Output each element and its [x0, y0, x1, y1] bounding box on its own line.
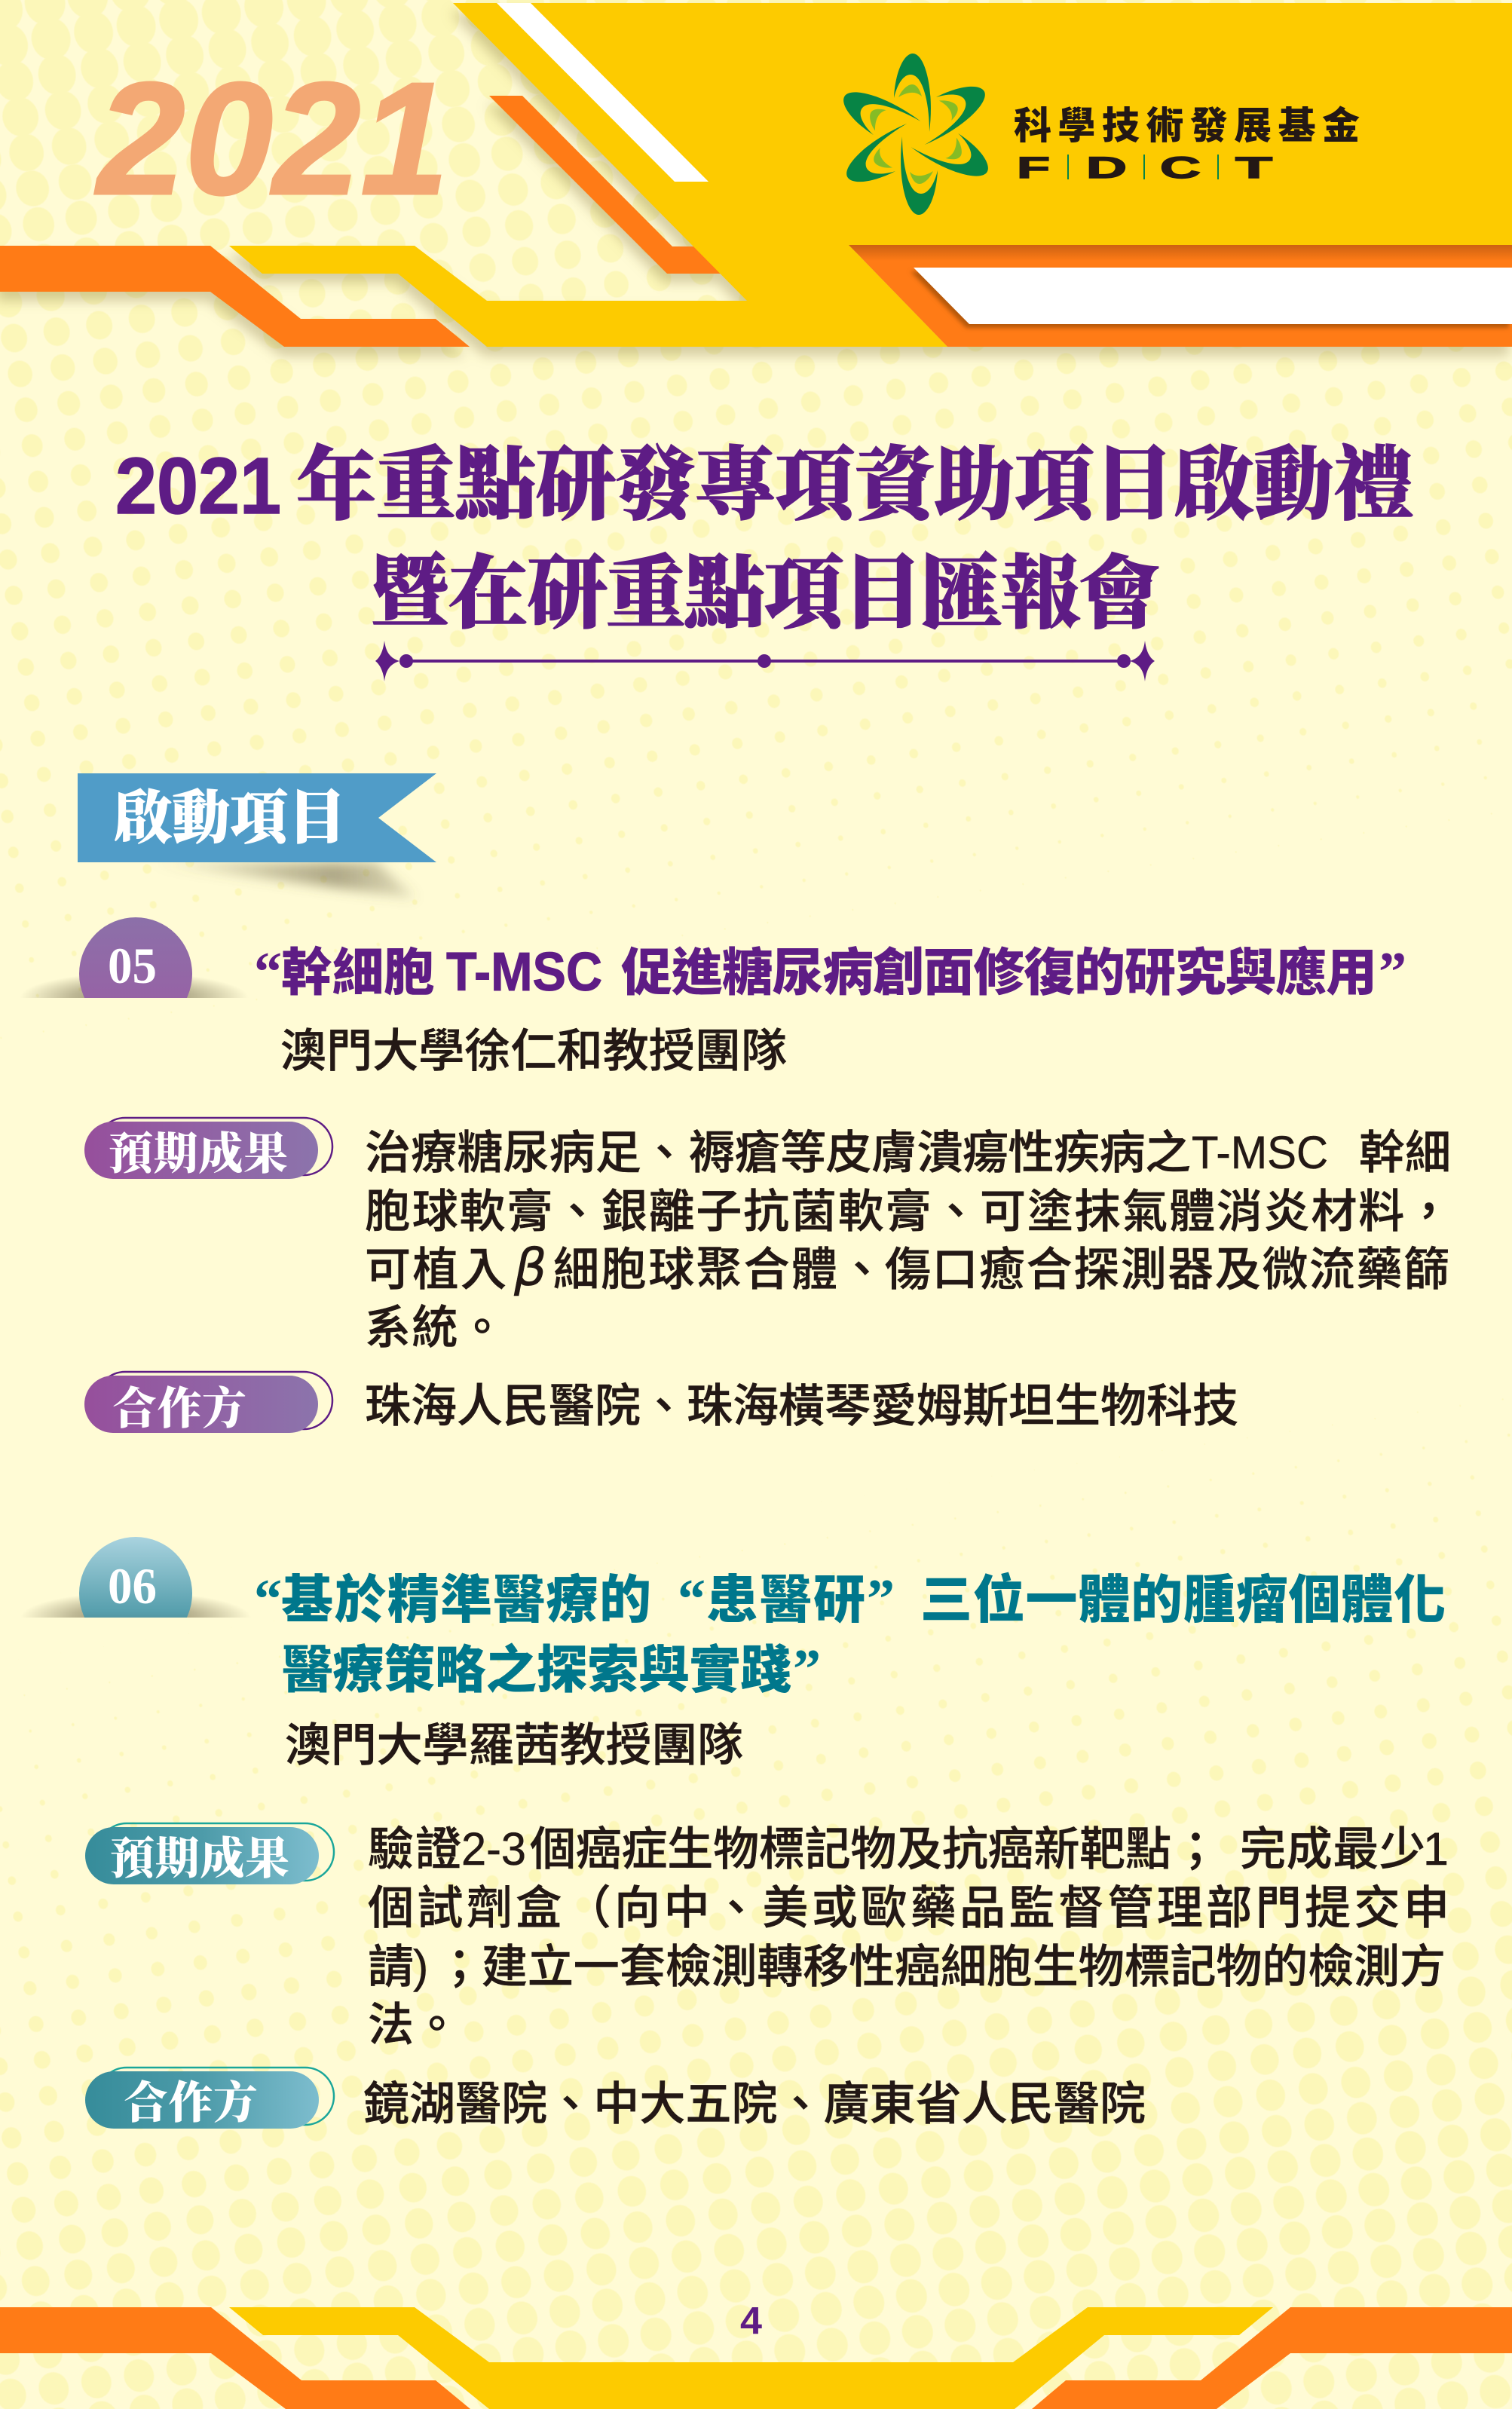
expected results label: 預期成果 — [109, 1129, 288, 1179]
project 05 title: ” — [1379, 941, 1406, 1003]
white diagonal strip — [497, 3, 709, 182]
page number: 4 — [740, 2299, 763, 2342]
section banner — [78, 773, 436, 898]
project 05 title: 幹細胞 — [281, 944, 435, 1002]
expected results text: 完成最少 — [1240, 1823, 1425, 1875]
header shapes — [0, 3, 1512, 347]
expected results text: 2-3 — [461, 1823, 526, 1875]
expected results text: ； — [436, 1941, 482, 1992]
project 05 team: 澳門大學徐仁和教授團隊 — [280, 1025, 787, 1076]
expected results text: 個試劑盒（向中、美或歐藥品監督管理部門提交申 — [368, 1882, 1449, 1933]
partners text: 珠海人民醫院、珠海橫琴愛姆斯坦生物科技 — [365, 1380, 1238, 1431]
project 05 title — [254, 941, 1406, 1003]
partners label — [84, 1372, 332, 1434]
FDCT letters — [1017, 152, 1272, 185]
white panel — [914, 268, 1512, 324]
footer shapes — [0, 2307, 470, 2409]
expected results text: T-MSC — [1192, 1127, 1328, 1178]
partners label: 合作方 — [124, 2078, 258, 2128]
expected results text: 可植入 — [365, 1244, 507, 1295]
header band — [0, 3, 1512, 347]
year 2021: 2021 — [94, 49, 448, 228]
project 06 title: 醫療策略之探索與實踐 — [282, 1642, 791, 1699]
expected results text: 傷口癒合探測器及微流藥篩 — [885, 1244, 1449, 1295]
FDCT logo — [835, 54, 1360, 215]
expected results text: 細胞球聚合體、 — [553, 1244, 885, 1295]
project 05 title: T-MSC — [446, 942, 602, 1002]
expected results label: 預期成果 — [110, 1834, 289, 1884]
project 05 title: 促進糖尿病創面修復的研究與應用 — [621, 944, 1377, 1002]
expected results text: 個癌症生物標記物及抗癌新靶點 — [530, 1823, 1171, 1875]
expected results label — [85, 1823, 334, 1884]
expected results text: 治療糖尿病足、 — [365, 1127, 687, 1178]
expected results text: 褥瘡等皮膚潰瘍性疾病之 — [689, 1127, 1191, 1178]
foundation name: 科學技術發展基金 — [1014, 105, 1360, 147]
number badge 05: 05 — [108, 937, 157, 994]
footer band — [0, 2299, 1512, 2409]
project 06 team: 澳門大學羅茜教授團隊 — [285, 1719, 743, 1771]
project 06 title: 患醫研 — [706, 1571, 865, 1629]
expected results text: 驗證 — [368, 1823, 461, 1875]
project 06 title: “ — [678, 1569, 705, 1630]
partners label: 合作方 — [112, 1384, 246, 1434]
project 06 title — [254, 1569, 1446, 1700]
number badge 05 — [26, 917, 243, 998]
banner shadow — [143, 862, 416, 898]
main title — [115, 442, 1413, 638]
project 06 — [20, 1537, 1449, 2129]
expected results text: 請 — [368, 1941, 414, 1992]
project 05 — [20, 917, 1452, 1434]
expected results text — [365, 1127, 1452, 1353]
expected results text: 系統。 — [365, 1302, 505, 1353]
expected results text: 法。 — [368, 1999, 460, 2050]
project 06 title: ” — [793, 1639, 821, 1700]
project 06 title: 三位一體的腫瘤個體化 — [920, 1571, 1446, 1629]
expected results text: 幹細 — [1359, 1127, 1451, 1178]
FDCT letters: C — [1160, 152, 1201, 185]
banner ribbon — [78, 773, 436, 862]
orange band shading — [849, 245, 1512, 261]
expected results text: 1 — [1423, 1823, 1449, 1875]
title divider ornament — [375, 641, 1155, 681]
FDCT letters: F — [1017, 152, 1050, 185]
expected results text — [368, 1823, 1449, 2050]
project 06 title: ” — [867, 1569, 895, 1630]
partners text: 鏡湖醫院、中大五院、廣東省人民醫院 — [363, 2078, 1146, 2129]
banner label: 啟動項目 — [114, 786, 346, 851]
expected results text: β — [513, 1238, 546, 1298]
project 06 title: “ — [254, 1569, 282, 1630]
number badge 06 — [27, 1537, 244, 1618]
expected results text: ) — [413, 1941, 428, 1992]
expected results text: ； — [1173, 1823, 1219, 1875]
project 05 title: “ — [254, 941, 282, 1003]
partners label — [85, 2068, 334, 2129]
FDCT letters: D — [1086, 152, 1127, 185]
title line 2: 暨在研重點項目匯報會 — [369, 550, 1159, 638]
number badge 06: 06 — [108, 1557, 157, 1615]
project 06 title: 基於精準醫療的 — [281, 1571, 651, 1629]
expected results text: 建立一套檢測轉移性癌細胞生物標記物的檢測方 — [482, 1941, 1446, 1992]
icon: FDCT flower — [835, 54, 996, 215]
title line 1: 2021 — [115, 442, 281, 531]
expected results label — [84, 1118, 332, 1179]
expected results text: 胞球軟膏、銀離子抗菌軟膏、可塗抹氣體消炎材料， — [365, 1186, 1452, 1237]
title line 1: 年重點研發專項資助項目啟動禮 — [296, 442, 1413, 530]
FDCT letters: T — [1235, 152, 1272, 185]
